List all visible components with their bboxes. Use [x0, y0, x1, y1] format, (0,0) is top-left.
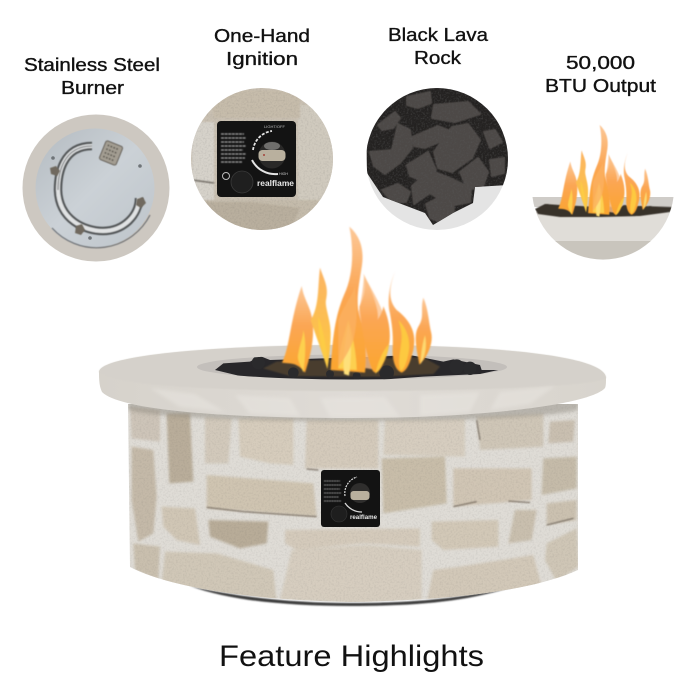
label: one-hand ignition — [214, 26, 310, 69]
rim side — [536, 212, 670, 241]
stone rim — [99, 345, 606, 418]
control panel on body — [321, 470, 380, 527]
circle: one-hand ignition photo — [190, 88, 336, 232]
small flames — [558, 125, 650, 217]
icon: ignition button — [331, 506, 347, 522]
footer heading: Feature Highlights — [219, 640, 484, 673]
label: 50,000 btu output: 50,000 — [566, 53, 635, 73]
label: 50,000 btu output: BTU Output — [545, 76, 656, 96]
main flames — [282, 227, 432, 376]
label: stainless steel burner — [24, 55, 160, 98]
fire bowl opening — [197, 354, 507, 380]
pit shadow — [190, 586, 515, 606]
rim chiselled edge — [150, 386, 555, 417]
control panel — [217, 121, 296, 197]
control panel: realflame — [257, 179, 295, 188]
stone body — [128, 398, 578, 604]
label: black lava rock: Black Lava — [388, 25, 489, 45]
label: one-hand ignition: Ignition — [226, 49, 298, 69]
icon: burner ring — [58, 146, 139, 231]
circle: stainless steel burner photo — [22, 114, 170, 262]
label: black lava rock: Rock — [414, 48, 462, 68]
control panel: LIGHT/OFF — [264, 124, 285, 129]
rim top surface — [99, 345, 606, 391]
label: one-hand ignition: One-Hand — [214, 26, 310, 46]
label: stainless steel burner: Burner — [61, 78, 124, 98]
shadow below rim — [128, 404, 578, 422]
base of bowl — [555, 241, 651, 260]
icon: ring brackets — [50, 166, 146, 235]
label: stainless steel burner: Stainless Steel — [24, 55, 160, 75]
circle: black lava rock photo — [366, 88, 508, 230]
control panel on body: realflame — [350, 515, 378, 521]
icon: ignition button — [231, 171, 253, 193]
icon: control knob — [258, 142, 286, 168]
lava rocks — [215, 355, 498, 380]
main fire pit — [99, 227, 606, 606]
icon: knob — [350, 483, 370, 503]
lava rock pile — [366, 88, 508, 230]
control panel: HIGH — [279, 172, 288, 176]
circle: btu output flame photo — [530, 125, 676, 261]
lava rocks — [535, 204, 672, 217]
icon: burner head — [99, 140, 123, 166]
label: 50,000 btu output — [545, 53, 656, 96]
label: black lava rock — [388, 25, 489, 68]
